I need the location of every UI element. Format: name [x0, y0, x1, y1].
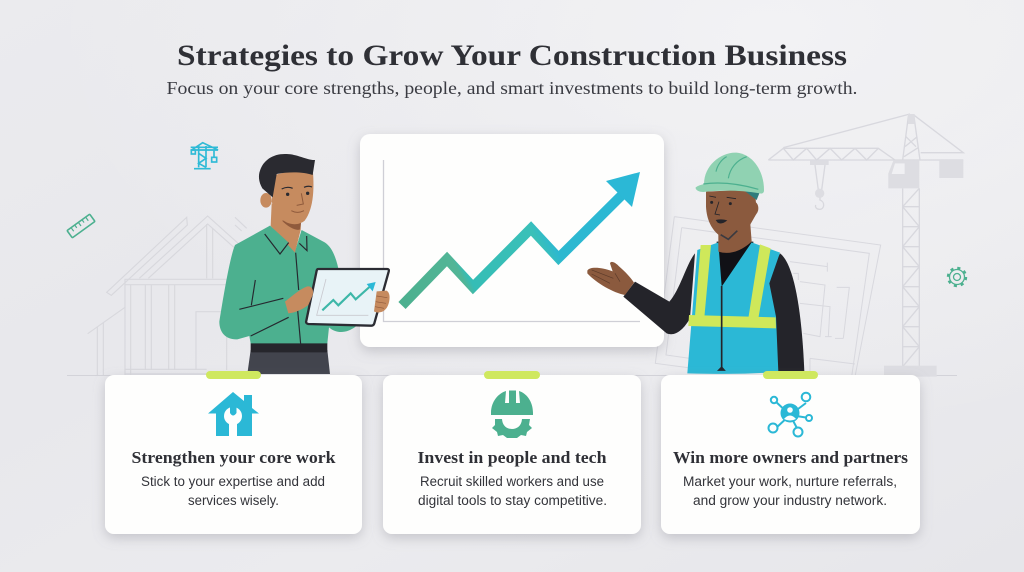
- panel: Invest in people and tech: [383, 371, 641, 534]
- card heading: Win more owners and partners: [673, 448, 908, 467]
- card text: Stick to your expertise and add: [141, 474, 325, 489]
- icon: people network: [768, 393, 812, 436]
- chart axes: [384, 160, 640, 322]
- panel: Strengthen your core work: [105, 371, 362, 534]
- icon: hard hat and gear: [491, 390, 533, 438]
- trend line with arrow: [402, 172, 640, 306]
- tablet: [306, 269, 389, 326]
- illustration: man with tablet: [219, 154, 390, 374]
- accent pill: [206, 371, 261, 379]
- card heading: Strengthen your core work: [132, 448, 336, 467]
- illustration: worker in hard hat: [587, 153, 804, 374]
- card heading: Invest in people and tech: [418, 448, 607, 467]
- card text: [141, 474, 325, 508]
- icon: small crane: [191, 143, 218, 169]
- card text: Recruit skilled workers and use: [420, 474, 604, 489]
- panel: Win more owners and partners: [661, 371, 920, 534]
- card text: [683, 474, 897, 508]
- icon: gear outline: [948, 268, 966, 286]
- hard hat: [704, 153, 764, 190]
- shirt: [219, 226, 356, 343]
- card text: digital tools to stay competitive.: [418, 493, 607, 508]
- card text: [418, 474, 607, 508]
- undershirt: [717, 242, 753, 287]
- card text: services wisely.: [188, 493, 279, 508]
- face: [272, 165, 313, 224]
- card text: and grow your industry network.: [693, 493, 887, 508]
- title: Strategies to Grow Your Construction Business: [177, 39, 847, 72]
- sleeves: [623, 253, 695, 334]
- ground line: [67, 374, 957, 376]
- head: [706, 189, 757, 236]
- hair: [259, 154, 315, 197]
- neck: [271, 203, 302, 253]
- subtitle: Focus on your core strengths, people, and smart investments to build long-term growth.: [166, 78, 858, 98]
- trousers: [247, 350, 330, 374]
- hand: [587, 262, 634, 295]
- collar flaps: [265, 226, 307, 254]
- card text: Market your work, nurture referrals,: [683, 474, 897, 489]
- accent pill: [763, 371, 818, 379]
- neck and collar: [718, 220, 752, 253]
- background sketch: blueprint sheet: [655, 217, 881, 377]
- vest: [687, 242, 780, 374]
- panel: growth chart: [360, 134, 664, 347]
- hands: [285, 286, 313, 313]
- accent pill: [484, 371, 540, 379]
- background sketch: tower crane: [768, 114, 963, 377]
- shirt lines: [239, 234, 307, 344]
- icon: house with wrench: [208, 392, 259, 436]
- icon: ruler: [67, 214, 95, 238]
- background sketch: house frame: [88, 216, 247, 375]
